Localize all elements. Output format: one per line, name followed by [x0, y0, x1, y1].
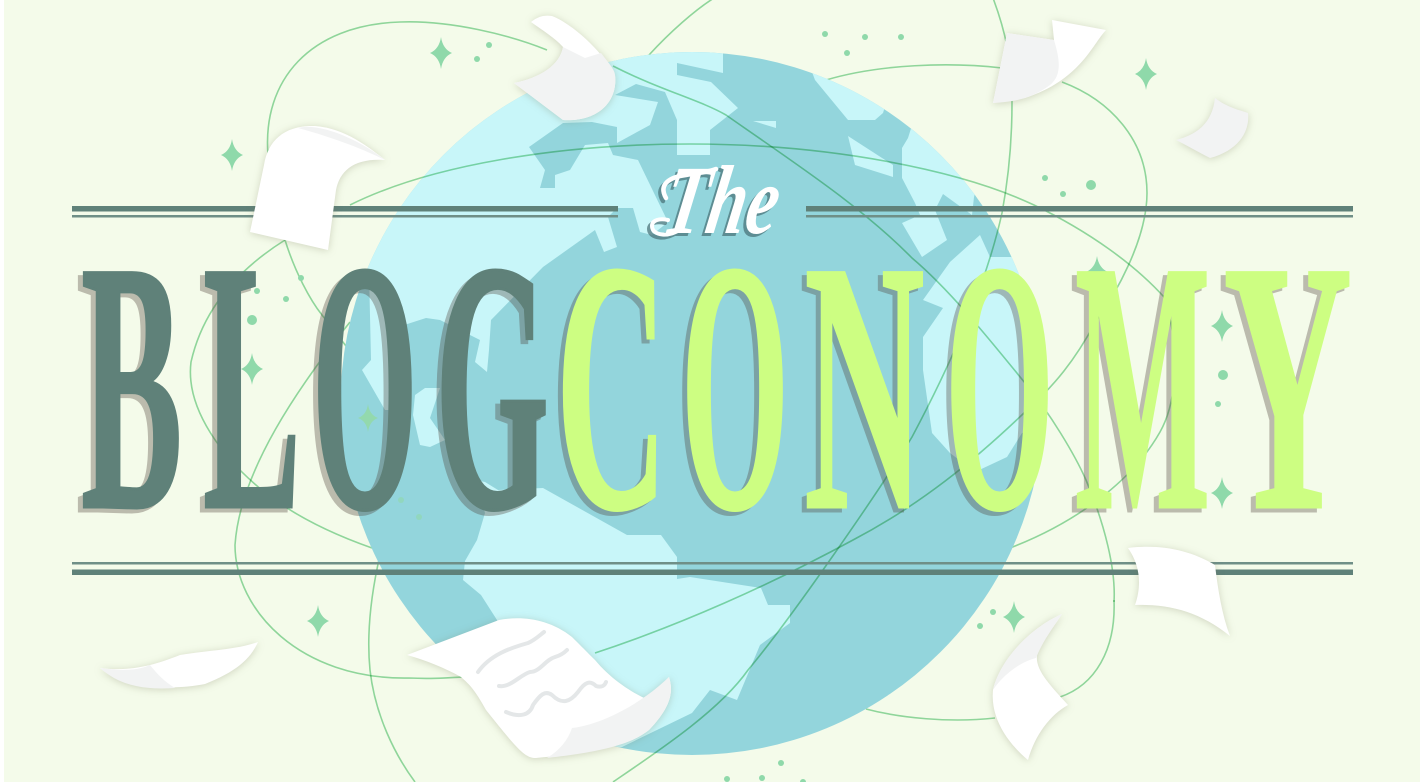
heading: conomy: N: [804, 189, 925, 585]
ocean: east patch: [848, 136, 893, 177]
orbit lines across globe: [350, 0, 1164, 782]
sparkles: [221, 37, 1233, 637]
heading: Blog: L: [203, 189, 301, 586]
top rule left: [72, 206, 618, 218]
paper: top centre: [514, 16, 615, 120]
ocean: east band: [902, 128, 974, 257]
heading: Blog: G: [435, 189, 549, 586]
paper: bottom left: [100, 642, 258, 688]
paper: right: [1128, 547, 1230, 636]
ocean: small patch: [753, 121, 776, 128]
heading: conomy: [556, 187, 1352, 585]
paper fold: [547, 677, 671, 758]
paper: far right: [1176, 98, 1248, 158]
orbit lines behind globe: [190, 0, 1175, 782]
heading: Blog: B: [81, 189, 182, 585]
dots: [247, 31, 1228, 782]
heading: Blog: [81, 188, 549, 586]
ocean: north-east edge: [812, 74, 884, 120]
globe land base: [330, 40, 1050, 770]
top rule right: [806, 206, 1353, 218]
handwriting squiggles: [478, 632, 606, 715]
ocean: far east: [923, 235, 1024, 469]
paper: top right: [993, 20, 1106, 103]
heading: conomy: O: [681, 188, 789, 585]
heading: The: The: [656, 146, 789, 255]
heading: Blog: O: [312, 188, 418, 585]
bottom rule: [72, 562, 1353, 575]
paper: top left: [250, 126, 385, 250]
ocean: south: [463, 480, 790, 752]
ocean: north-west: [362, 52, 738, 410]
heading: conomy: C: [556, 187, 667, 585]
paper: bottom right: [993, 614, 1068, 760]
heading: conomy: M: [1075, 188, 1210, 584]
heading: conomy: O: [945, 188, 1054, 585]
heading: conomy: Y: [1223, 189, 1352, 585]
ocean: lake: [413, 388, 445, 447]
sparkle on globe: [358, 404, 378, 432]
globe: [341, 52, 1034, 755]
paper: bottom centre with writing: [407, 618, 671, 758]
